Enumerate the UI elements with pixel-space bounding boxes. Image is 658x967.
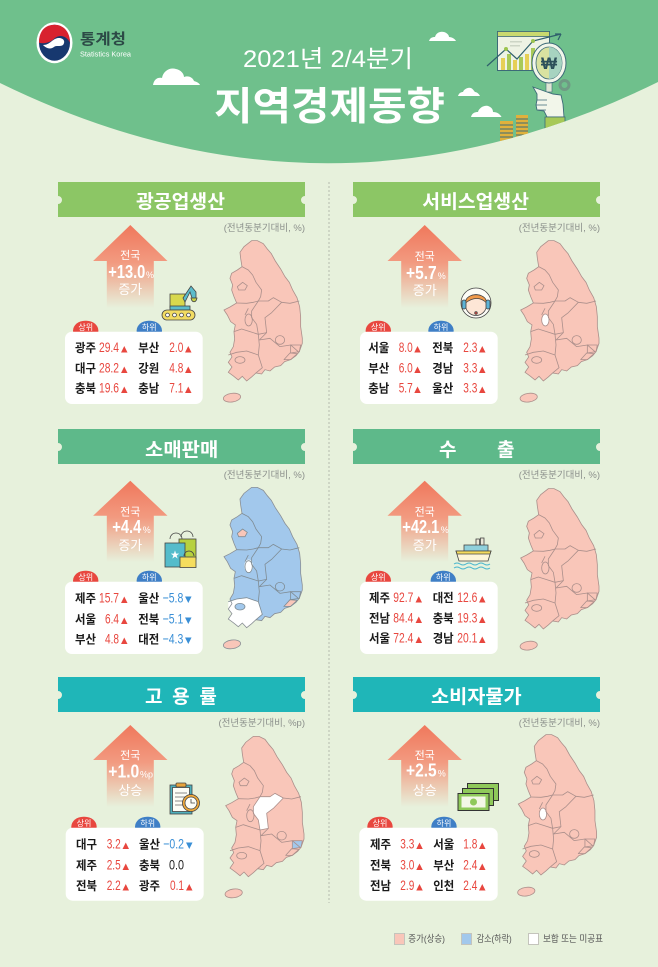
ranking table [65, 582, 203, 654]
ranking table: 3.3 [463, 359, 477, 375]
national arrow: % [143, 525, 151, 535]
ranking table: 경남 [433, 632, 454, 646]
ranking table: −4.3 [163, 630, 183, 646]
national arrow [388, 725, 462, 807]
ranking table: 전남 [369, 612, 390, 626]
ranking table: 대전 [433, 591, 454, 605]
icon: clipboard and clock [170, 783, 200, 814]
legend: 감소(하락) [477, 933, 512, 945]
ranking table: 19.3 [457, 610, 477, 626]
icon: cargo ship [454, 538, 491, 569]
ranking table: ▲ [416, 635, 422, 645]
national arrow [93, 481, 168, 562]
national arrow: 전국 [415, 250, 435, 263]
ranking table: ▲ [479, 841, 486, 851]
badge: bottom: 하위 [142, 322, 157, 332]
ranking table: 전북 [432, 341, 453, 355]
ranking table [359, 828, 498, 901]
ranking table: 1.8 [463, 836, 477, 852]
national arrow: +1.0 [108, 762, 139, 782]
ranking table [66, 828, 204, 901]
ranking table: 전북 [76, 879, 97, 893]
logo: Statistics Korea: Statistics Korea [80, 52, 131, 58]
ranking table: ▲ [121, 595, 128, 605]
national arrow: 전국 [120, 506, 140, 519]
unit note: (전년동분기대비, %) [224, 470, 305, 481]
national arrow: 전국 [120, 749, 140, 762]
ranking table: ▲ [121, 365, 128, 375]
national arrow: %p [140, 770, 153, 780]
ranking table: ▲ [479, 635, 486, 645]
ranking table: 충남 [368, 381, 389, 395]
ranking table: 6.4 [105, 610, 119, 626]
national arrow: 증가 [413, 538, 437, 553]
header band [0, 0, 658, 163]
ranking table: 3.3 [463, 379, 477, 395]
ranking table: 3.0 [400, 856, 414, 872]
badge: top [366, 571, 391, 591]
unit note: (전년동분기대비, %) [519, 718, 600, 729]
badge: bottom [431, 817, 457, 837]
icon: shopping bags [165, 531, 196, 568]
unit note: (전년동분기대비, %) [224, 223, 305, 234]
illustration: chart, magnifier, hand, coins [487, 32, 569, 142]
ranking table: 울산 [432, 381, 453, 395]
ranking table: −0.2 [163, 836, 184, 852]
ranking table: 광주 [75, 341, 96, 355]
ranking table: ▲ [414, 365, 421, 375]
badge: top: 상위 [77, 818, 91, 828]
ranking table: ▲ [416, 862, 423, 872]
ranking table: 충북 [75, 381, 96, 395]
ranking table: 인천 [433, 879, 454, 893]
unit note: (전년동분기대비, %) [519, 470, 600, 481]
ranking table: 2.3 [463, 339, 477, 355]
national arrow [388, 481, 462, 562]
ranking table: 울산 [138, 592, 159, 606]
ranking table: ▲ [185, 365, 192, 375]
ranking table: 2.2 [107, 877, 121, 893]
ranking table: ▲ [416, 615, 422, 625]
ranking table: 서울 [368, 341, 389, 355]
ranking table: 서울 [433, 838, 454, 852]
national arrow: 상승 [413, 783, 437, 798]
ranking table: ▲ [479, 385, 486, 395]
ranking table: 대전 [138, 632, 159, 646]
badge: bottom [428, 321, 454, 341]
badge: top [366, 321, 391, 341]
national arrow: 전국 [415, 506, 435, 519]
icon: banknotes [458, 784, 498, 810]
ranking table: 7.1 [169, 379, 183, 395]
ranking table: ▲ [414, 385, 421, 395]
banner [353, 429, 600, 464]
logo: Statistics Korea [36, 22, 131, 63]
ranking table: 제주 [369, 590, 390, 605]
banner [58, 429, 305, 464]
ranking table: 경남 [432, 361, 453, 375]
ranking table: 3.2 [107, 836, 121, 852]
ranking table: 대구 [75, 361, 96, 375]
ranking table: −5.1 [163, 610, 183, 626]
ranking table: 대구 [76, 838, 97, 852]
ranking table: 92.7 [393, 589, 413, 605]
ranking table: ▲ [186, 882, 193, 892]
ranking table: ▲ [416, 882, 423, 892]
national arrow: 전국 [120, 249, 140, 262]
national arrow: % [441, 525, 449, 535]
ranking table: ▲ [479, 365, 486, 375]
ranking table: 충북 [433, 612, 454, 626]
national arrow: +4.4 [112, 517, 141, 537]
ranking table: ▲ [479, 862, 486, 872]
ranking table: 제주 [76, 857, 97, 872]
panel: consumer prices [353, 677, 600, 901]
center divider [328, 182, 330, 903]
ranking table: ▲ [185, 385, 192, 395]
national arrow: % [438, 769, 446, 779]
ranking table: ▲ [414, 344, 421, 354]
ranking table: 0.0 [169, 856, 184, 872]
ranking table: ▲ [121, 344, 128, 354]
legend: 증가(상승) [408, 934, 445, 945]
ranking table: 0.1 [170, 877, 184, 893]
badge: bottom [431, 571, 456, 591]
icon: call center agent [461, 288, 491, 318]
national arrow [93, 725, 168, 807]
ranking table: 강원 [138, 361, 159, 375]
banner: 고 용 률 [145, 687, 219, 708]
badge: top: 상위 [371, 322, 386, 332]
ranking table: 19.6 [99, 379, 119, 395]
ranking table [360, 332, 498, 404]
map [223, 241, 302, 403]
national arrow [388, 225, 462, 308]
ranking table: 서울 [75, 612, 96, 626]
banner: 수 [439, 439, 456, 461]
national arrow: % [146, 270, 154, 280]
national arrow: % [438, 271, 446, 281]
ranking table: 부산 [138, 341, 159, 355]
badge: top: 상위 [78, 572, 93, 582]
national arrow: 증가 [413, 283, 437, 298]
banner: 서비스업생산 [422, 191, 529, 213]
map [224, 736, 304, 899]
ranking table: ▲ [122, 841, 130, 851]
national arrow [93, 225, 168, 308]
panel: retail sales [58, 429, 305, 654]
unit note: (전년동분기대비, %p) [218, 718, 305, 729]
national arrow: +2.5 [406, 761, 437, 781]
banner [58, 182, 305, 217]
ranking table: 5.7 [399, 379, 413, 395]
ranking table: 부산 [433, 858, 454, 872]
badge: top [73, 571, 98, 591]
ranking table: 12.6 [457, 589, 477, 605]
national arrow: 증가 [118, 282, 142, 297]
national arrow: 상승 [118, 783, 142, 798]
ranking table: 2.4 [463, 877, 477, 893]
ranking table [65, 332, 203, 404]
ranking table: ▲ [122, 882, 130, 892]
icon: shopping bags: ★ [170, 550, 180, 560]
ranking table: 제주 [75, 591, 96, 606]
ranking table: 제주 [370, 837, 391, 852]
banner: 소비자물가 [431, 686, 522, 708]
badge: bottom [137, 321, 162, 341]
ranking table: 광주 [139, 879, 160, 893]
banner: 광공업생산 [136, 191, 225, 213]
ranking table: ▲ [121, 616, 128, 626]
ranking table: 전북 [370, 858, 391, 872]
ranking table: ▲ [479, 615, 486, 625]
ranking table: 3.3 [400, 836, 414, 852]
badge: top [367, 817, 393, 837]
badge: top [71, 817, 97, 837]
ranking table: 서울 [369, 632, 390, 646]
badge: bottom: 하위 [142, 572, 157, 582]
panel: mining and manufacturing production [58, 182, 305, 404]
national arrow: 전국 [415, 749, 435, 762]
map [517, 735, 597, 897]
national arrow: 증가 [118, 538, 142, 553]
ranking table: 울산 [139, 838, 160, 852]
ranking table: 84.4 [393, 610, 413, 626]
clouds [153, 32, 502, 117]
ranking table: ▲ [479, 344, 486, 354]
ranking table: 부산 [75, 632, 96, 646]
banner [353, 182, 600, 217]
ranking table: ▼ [185, 636, 192, 646]
ranking table: 2.9 [400, 877, 414, 893]
ranking table: ▲ [479, 594, 486, 604]
ranking table: ▲ [416, 594, 422, 604]
ranking table: 4.8 [169, 359, 183, 375]
illustration: chart, magnifier, hand, coins: ₩ [541, 54, 558, 73]
badge: bottom: 하위 [437, 818, 451, 828]
ranking table: ▲ [122, 862, 130, 872]
panel: service production [353, 182, 600, 404]
map [223, 487, 302, 650]
ranking table: ▼ [185, 616, 192, 626]
ranking table: −5.8 [163, 590, 183, 606]
title: period: 2021년 2/4분기 [243, 46, 413, 73]
badge: top: 상위 [373, 818, 387, 828]
panel: employment rate [58, 677, 305, 901]
ranking table: ▲ [416, 841, 423, 851]
national arrow: +5.7 [406, 263, 437, 283]
ranking table: 20.1 [457, 630, 477, 646]
ranking table: 부산 [368, 361, 389, 375]
banner: 소매판매 [145, 439, 218, 461]
badge: top [73, 321, 98, 341]
ranking table: 28.2 [99, 359, 119, 375]
badge: top: 상위 [371, 572, 386, 582]
map [519, 489, 599, 651]
badge: top: 상위 [78, 322, 93, 332]
ranking table: ▲ [121, 385, 128, 395]
ranking table: ▲ [479, 882, 486, 892]
national arrow: +42.1 [402, 517, 439, 537]
ranking table: 2.5 [107, 856, 121, 872]
badge: bottom: 하위 [434, 322, 448, 332]
badge: bottom [137, 571, 162, 591]
badge: bottom: 하위 [140, 818, 155, 828]
ranking table: 2.4 [463, 856, 477, 872]
map [519, 241, 599, 403]
badge: bottom: 하위 [436, 572, 451, 582]
banner: 출 [497, 439, 514, 461]
badge: bottom [135, 817, 160, 837]
ranking table: 72.4 [393, 630, 413, 646]
national arrow: +13.0 [108, 262, 145, 282]
ranking table: ▲ [185, 344, 192, 354]
ranking table: 전북 [138, 612, 159, 626]
ranking table: ▲ [121, 636, 128, 646]
ranking table: 6.0 [399, 359, 413, 375]
panel: exports [353, 429, 600, 654]
ranking table [360, 582, 498, 654]
ranking table: 전남 [370, 879, 391, 893]
unit note: (전년동분기대비, %) [519, 223, 600, 234]
ranking table: 2.0 [169, 339, 183, 355]
icon: excavator [162, 286, 197, 320]
ranking table: 충남 [138, 381, 159, 395]
legend: 보합 또는 미공표 [543, 934, 603, 945]
ranking table: 29.4 [99, 339, 119, 355]
ranking table: 4.8 [105, 630, 119, 646]
logo: Statistics Korea: 통계청 [80, 31, 126, 48]
ranking table: ▼ [186, 841, 193, 851]
legend [394, 933, 603, 945]
ranking table: 8.0 [399, 339, 413, 355]
ranking table: 충북 [139, 858, 160, 872]
ranking table: ▼ [185, 595, 192, 605]
banner [58, 677, 305, 712]
title: main: 지역경제동향 [214, 86, 445, 129]
ranking table: 15.7 [99, 590, 119, 606]
banner [353, 677, 600, 712]
